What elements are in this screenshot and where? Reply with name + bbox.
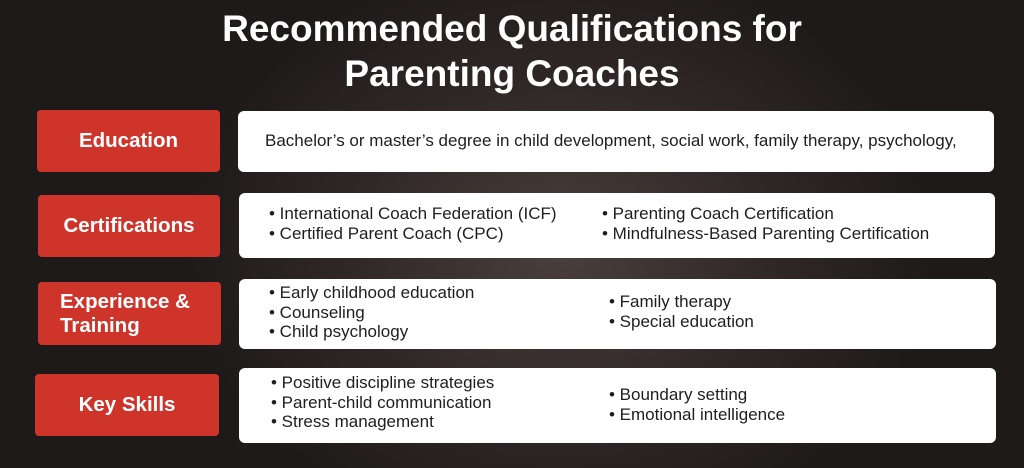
list: experience col2 xyxy=(609,292,754,330)
title xyxy=(222,8,802,94)
title: Recommended Qualifications for xyxy=(222,8,802,49)
label: Education: Education xyxy=(79,129,178,152)
label: Certifications: Certifications xyxy=(64,214,194,237)
panel: education xyxy=(238,111,994,172)
panel: experience xyxy=(239,279,996,349)
label: Education xyxy=(37,110,220,172)
title: Parenting Coaches xyxy=(344,53,680,94)
list: certifications col2: • Parenting Coach Certification xyxy=(602,204,834,223)
list: experience col2: • Family therapy xyxy=(609,292,731,311)
panel: key skills xyxy=(239,368,996,443)
label: Key Skills xyxy=(35,374,219,436)
list: certifications col2: • Mindfulness-Based Parenting Certification xyxy=(602,224,929,242)
label: Key Skills: Key Skills xyxy=(79,393,175,416)
list: certifications col2 xyxy=(602,204,929,242)
panel: certifications xyxy=(239,193,995,258)
list: skills col2: • Boundary setting xyxy=(609,385,747,404)
list: skills col1 xyxy=(271,373,494,431)
list: certifications col1: • International Coach Federation (ICF) xyxy=(269,204,557,223)
label: Experience & Training: Experience & xyxy=(60,290,190,312)
text: education: Bachelor’s or master’s degree in child development, social work, family therapy, psychology, xyxy=(265,131,957,150)
list: skills col1: • Parent-child communication xyxy=(271,392,491,412)
list: experience col1: • Child psychology xyxy=(269,322,408,341)
list: experience col1 xyxy=(269,283,474,341)
list: experience col2: • Special education xyxy=(609,312,754,330)
label: Experience & Training: Training xyxy=(60,314,140,336)
list: skills col1: • Stress management xyxy=(271,412,434,431)
label: Experience & Training xyxy=(38,282,221,345)
list: experience col1: • Counseling xyxy=(269,302,365,322)
list: skills col2 xyxy=(609,385,785,424)
label: Certifications xyxy=(38,195,220,257)
list: skills col1: • Positive discipline strategies xyxy=(271,373,494,392)
list: certifications col1 xyxy=(269,204,557,242)
list: experience col1: • Early childhood education xyxy=(269,283,474,302)
list: skills col2: • Emotional intelligence xyxy=(609,404,785,424)
list: certifications col1: • Certified Parent Coach (CPC) xyxy=(269,224,504,242)
